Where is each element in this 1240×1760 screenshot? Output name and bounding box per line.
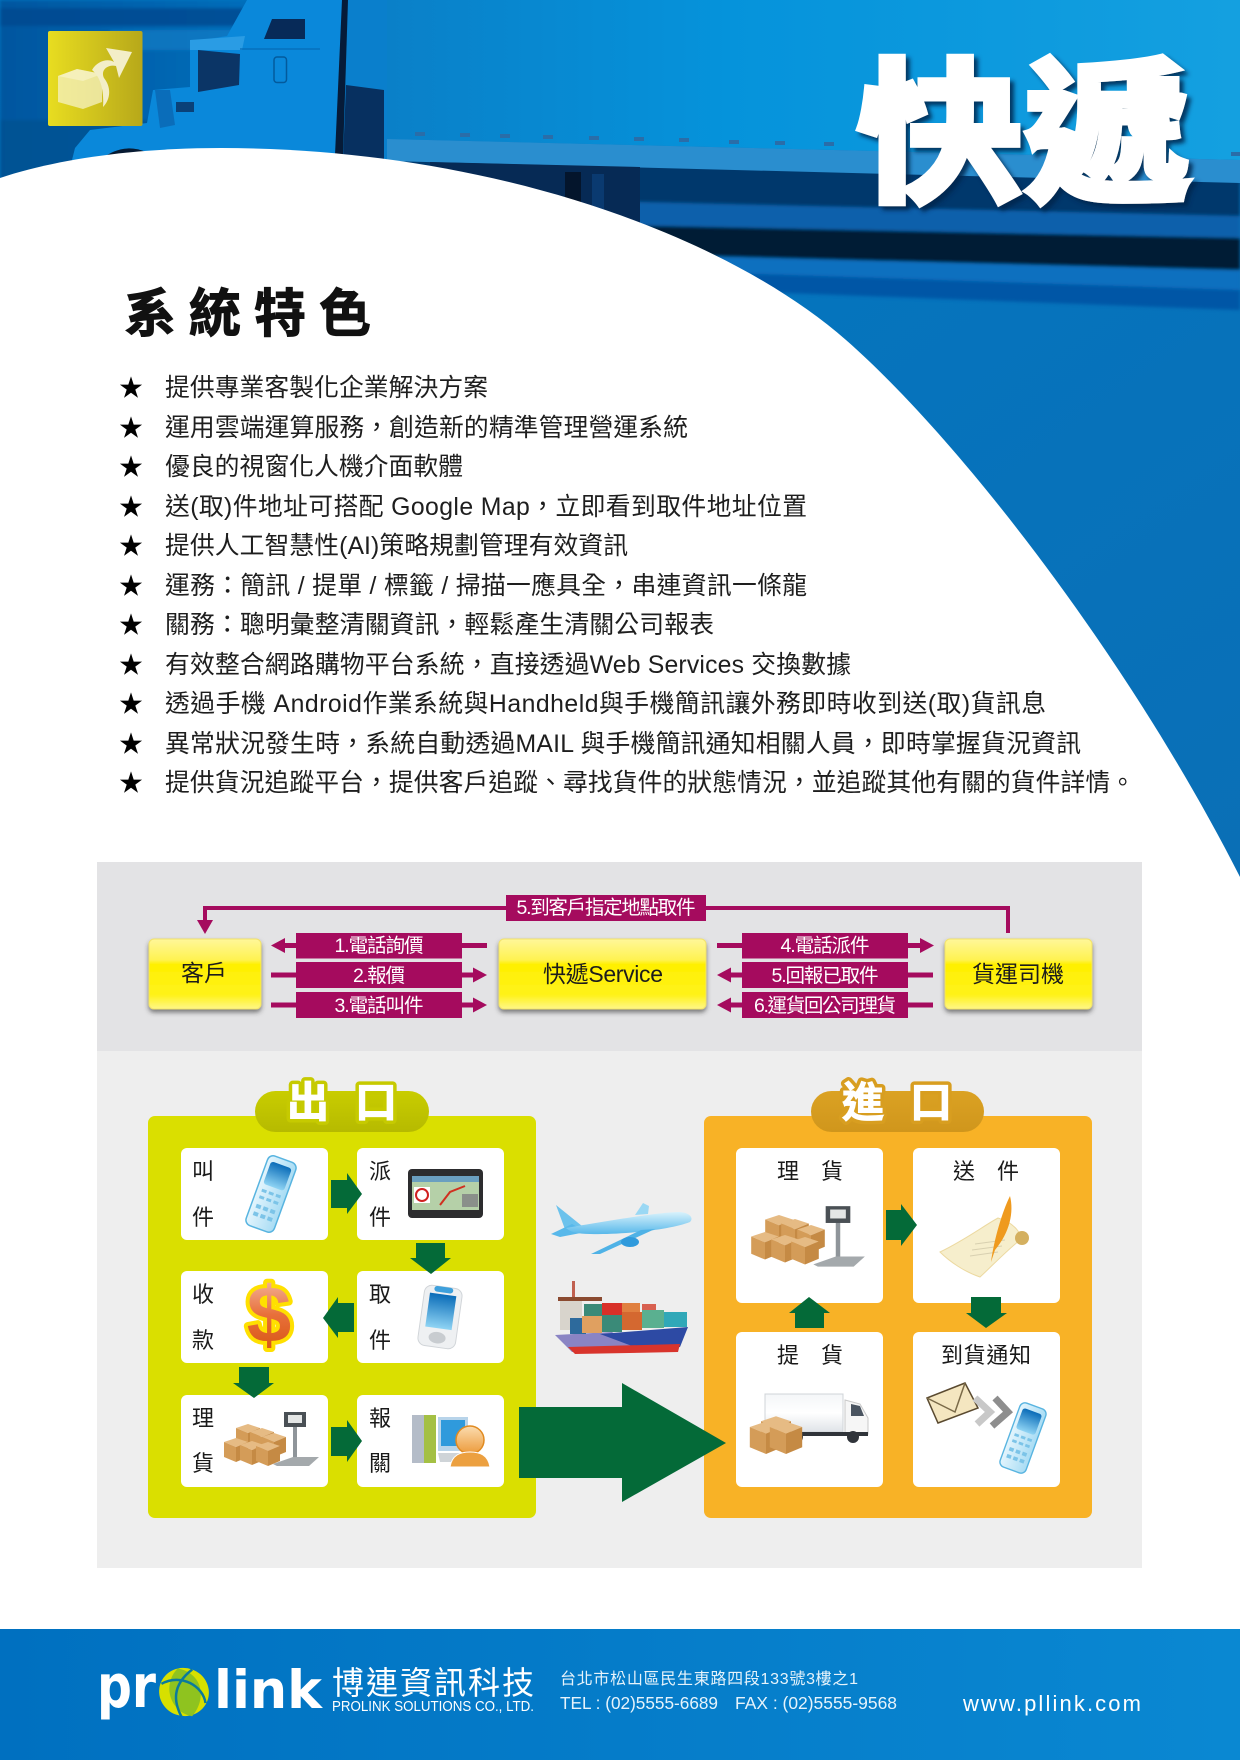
arrow row 6 left	[717, 992, 933, 1018]
icon: cartons and scale	[751, 1206, 865, 1267]
arrow row 5 left	[717, 962, 933, 988]
title: 快	[857, 49, 1023, 222]
card: pickup: 提 貨	[777, 1343, 843, 1368]
flow diagram	[149, 895, 1092, 1018]
card: delivery	[913, 1148, 1060, 1303]
panel: service flow background	[97, 862, 1142, 1051]
feature list: 提供人工智慧性(AI)策略規劃管理有效資訊	[165, 532, 628, 560]
feature list: ★	[119, 691, 143, 718]
box: express service: 快遞Service	[543, 961, 663, 987]
arrow: pickup to sorting	[789, 1297, 830, 1328]
arrow: driver back to customer	[197, 908, 1008, 934]
logo: prolink wordmark: pr	[97, 1652, 156, 1722]
icon: envelope	[927, 1383, 978, 1423]
icon: gps device	[408, 1169, 483, 1218]
arrow: sorting to customs	[331, 1420, 362, 1462]
feature list: ★	[119, 731, 143, 758]
card: collect	[357, 1271, 504, 1363]
heading: import pill: 口	[910, 1079, 952, 1126]
feature list: ★	[119, 652, 143, 679]
arrow row 2 right: 2.報價	[353, 965, 405, 987]
icon: quill and paper	[940, 1196, 1029, 1277]
road motion streaks	[0, 0, 1240, 310]
heading: export pill: 口	[355, 1079, 397, 1126]
logo: prolink wordmark: link	[214, 1660, 324, 1721]
card: sorting import: 理 貨	[777, 1159, 843, 1184]
feature list: ★	[119, 494, 143, 521]
title	[857, 49, 1190, 222]
feature list: 異常狀況發生時，系統自動透過MAIL 與手機簡訊通知相關人員，即時掌握貨況資訊	[165, 730, 1081, 758]
feature list: 送(取)件地址可搭配 Google Map，立即看到取件地址位置	[165, 493, 807, 521]
arrow row 2 right	[271, 962, 487, 988]
arrow row 4 right	[717, 933, 934, 958]
card: collect: 取	[369, 1282, 391, 1307]
heading: import pill	[811, 1079, 984, 1132]
card: payment: 款	[192, 1328, 214, 1353]
logo: prolink wordmark	[97, 1652, 324, 1723]
card: collect: 件	[369, 1328, 391, 1353]
arrow: call to dispatch	[331, 1173, 362, 1214]
feature list: 運務：簡訊 / 提單 / 標籤 / 掃描一應具全，串連資訊一條龍	[165, 572, 807, 600]
heading: system features: 系統特色	[124, 286, 384, 344]
box: freight driver: 貨運司機	[972, 961, 1064, 987]
feature list: ★	[119, 415, 143, 442]
card: call: 叫	[192, 1159, 214, 1184]
icon: computer and person	[412, 1415, 490, 1467]
panel: export	[148, 1079, 536, 1518]
card: dispatch: 件	[369, 1205, 391, 1230]
icon: chevrons	[975, 1398, 1008, 1426]
card: payment	[181, 1270, 328, 1363]
card: call	[181, 1148, 328, 1240]
feature list	[119, 374, 1135, 797]
arrow row 6 left: 6.運貨回公司理貨	[754, 995, 896, 1017]
icon: pda	[417, 1284, 463, 1350]
heading: import pill: 進	[842, 1079, 884, 1126]
arrow row 4 right: 4.電話派件	[780, 935, 870, 957]
icon: yellow logo square with box and arrow	[48, 31, 142, 126]
feature list: 關務：聰明彙整清關資訊，輕鬆產生清關公司報表	[165, 611, 714, 639]
contact details: FAX : (02)5555-9568	[735, 1693, 897, 1713]
arrow row 1 left: 1.電話詢價	[334, 935, 424, 957]
card: payment: 收	[192, 1282, 214, 1307]
contact details: TEL : (02)5555-6689	[560, 1693, 718, 1713]
contact details	[560, 1670, 897, 1713]
card: customs	[357, 1395, 504, 1487]
arrow row 3 right: 3.電話叫件	[334, 995, 424, 1017]
feature list: ★	[119, 573, 143, 600]
footer band	[0, 1629, 1240, 1760]
icon: truck with cartons	[750, 1394, 868, 1454]
trailer	[387, 0, 1240, 160]
card: sorting: 貨	[192, 1451, 214, 1476]
arrow: big export to import	[519, 1383, 726, 1502]
panel: import	[704, 1079, 1092, 1518]
truck cab	[72, 0, 345, 160]
website: www.pllink.com	[962, 1691, 1141, 1716]
arrow: sorting to delivery	[886, 1204, 917, 1246]
arrow: delivery to notice	[966, 1297, 1007, 1328]
heading: import pill: 進	[842, 1079, 884, 1126]
card: customs: 報	[369, 1406, 391, 1431]
company name: 博連資訊科技	[332, 1665, 534, 1701]
contact details: 台北市松山區民生東路四段133號3樓之1	[560, 1670, 858, 1688]
heading: export pill: 出	[287, 1079, 329, 1126]
card: arrival notice	[913, 1332, 1060, 1487]
arrow row 5 left: 5.回報已取件	[772, 965, 878, 987]
box: express service	[499, 939, 706, 1009]
box: freight driver	[945, 939, 1092, 1009]
icon: dollar sign: $	[247, 1270, 291, 1359]
card: customs: 關	[369, 1451, 391, 1476]
icon: container ship	[555, 1281, 688, 1354]
card: sorting	[181, 1395, 328, 1487]
card: sorting: 理	[192, 1406, 214, 1431]
feature list: ★	[119, 375, 143, 402]
feature list: 提供貨況追蹤平台，提供客戶追蹤、尋找貨件的狀態情況，並追蹤其他有關的貨件詳情。	[165, 769, 1135, 797]
card: call: 件	[192, 1205, 214, 1230]
icon: phone	[998, 1401, 1048, 1475]
header photo: blue truck background	[0, 0, 1240, 880]
label: step 5 pickup: 5.到客戶指定地點取件	[516, 897, 696, 919]
arrow row 3 right	[271, 992, 487, 1018]
feature list: 優良的視窗化人機介面軟體	[165, 453, 463, 481]
icon: phone	[244, 1154, 298, 1234]
feature list: 透過手機 Android作業系統與Handheld與手機簡訊讓外務即時收到送(取)貨訊息	[165, 690, 1046, 718]
arrow row 1 left	[271, 933, 487, 958]
heading: export pill	[255, 1079, 429, 1132]
box: customer: 客戶	[181, 960, 227, 986]
card: pickup	[736, 1332, 883, 1487]
card: sorting import	[736, 1148, 883, 1303]
card: arrival notice: 到貨通知	[941, 1343, 1031, 1368]
heading: export pill: 出	[287, 1079, 329, 1126]
icon: cartons and scale	[224, 1412, 319, 1466]
card: dispatch: 派	[369, 1159, 391, 1184]
feature list: 有效整合網路購物平台系統，直接透過Web Services 交換數據	[165, 651, 851, 679]
card: dispatch	[357, 1148, 504, 1240]
gap between cab and trailer	[343, 0, 387, 160]
arrow: dispatch to collect	[410, 1243, 451, 1274]
panel: import export background	[97, 1051, 1142, 1568]
feature list: ★	[119, 533, 143, 560]
icon: airplane	[551, 1203, 692, 1254]
arrow: collect to payment	[323, 1297, 354, 1338]
arrow: payment to sorting	[233, 1367, 274, 1398]
title: 遞	[1024, 49, 1190, 222]
feature list: ★	[119, 454, 143, 481]
feature list: 提供專業客製化企業解決方案	[165, 374, 488, 402]
feature list: ★	[119, 770, 143, 797]
heading: import pill: 口	[910, 1079, 952, 1126]
feature list: 運用雲端運算服務，創造新的精準管理營運系統	[165, 414, 688, 442]
box: customer	[149, 939, 261, 1009]
company name: PROLINK SOLUTIONS CO., LTD.	[332, 1699, 534, 1715]
card: delivery: 送 件	[953, 1159, 1019, 1184]
feature list: ★	[119, 612, 143, 639]
heading: export pill: 口	[355, 1079, 397, 1126]
